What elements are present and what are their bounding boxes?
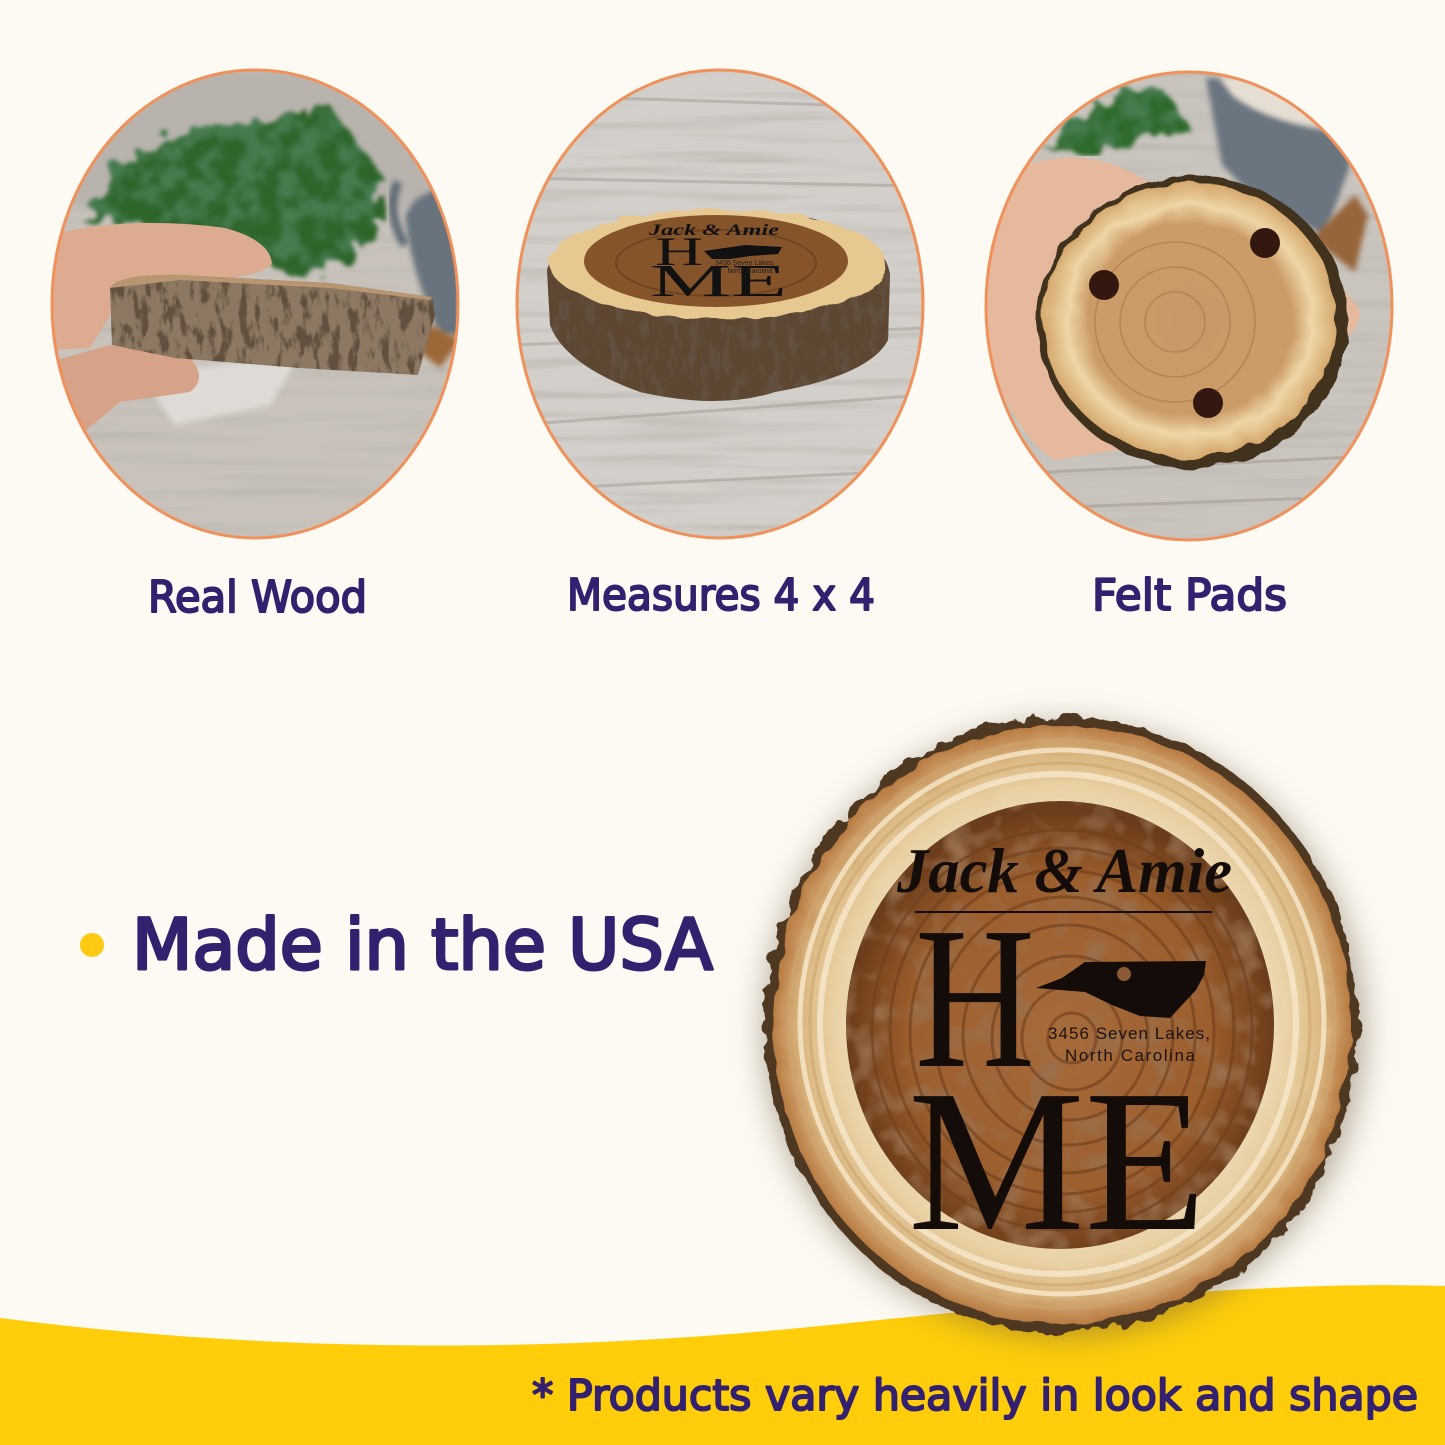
felt pads (1089, 228, 1280, 418)
panel: measures photo: ME (650, 255, 787, 306)
large coaster: North Carolina (1065, 1046, 1196, 1065)
caption: measures: Measures 4 x 4 (567, 570, 875, 621)
yellow wave footer (0, 1285, 1445, 1445)
heading: made in the usa: Made in the USA (132, 904, 713, 986)
panel: measures photo: H (655, 229, 703, 274)
panel: real wood photo (50, 68, 460, 540)
engraved H: H (915, 885, 1035, 1110)
plant (85, 100, 385, 282)
panel: measures photo: North Carolina (727, 268, 773, 275)
mug (405, 175, 460, 335)
caption: felt pads: Felt Pads (1092, 570, 1287, 621)
icon: north carolina map (1036, 961, 1206, 1018)
sapwood (773, 726, 1351, 1324)
mug (1206, 78, 1350, 235)
coaster engraving: Jack & Amie (647, 222, 779, 239)
engraved ME: ME (908, 1048, 1206, 1273)
large coaster (764, 717, 1364, 1336)
engraved names: Jack & Amie (896, 835, 1232, 906)
panel: felt pads photo (985, 70, 1395, 542)
caption: real wood: Real Wood (148, 572, 367, 623)
engraved address: 3456 Seven Lakes, (1048, 1024, 1210, 1043)
bullet (80, 933, 104, 957)
coaster side (547, 212, 890, 401)
engraved rule (915, 911, 1212, 913)
hand (987, 158, 1360, 460)
fingers (50, 223, 272, 350)
coaster top (550, 209, 886, 319)
footnote: * Products vary heavily in look and shape (532, 1371, 1418, 1421)
planter (154, 362, 294, 426)
slice back (1038, 176, 1348, 468)
wood slice side (110, 275, 435, 375)
panel: measures photo: 3456 Seven Lakes, (715, 260, 775, 267)
growth rings (872, 830, 1252, 1230)
icon: map pin (1117, 967, 1131, 981)
bark edge (765, 717, 1359, 1333)
plant (1045, 90, 1195, 150)
panel: measures photo (515, 68, 925, 540)
heartwood (846, 801, 1274, 1249)
